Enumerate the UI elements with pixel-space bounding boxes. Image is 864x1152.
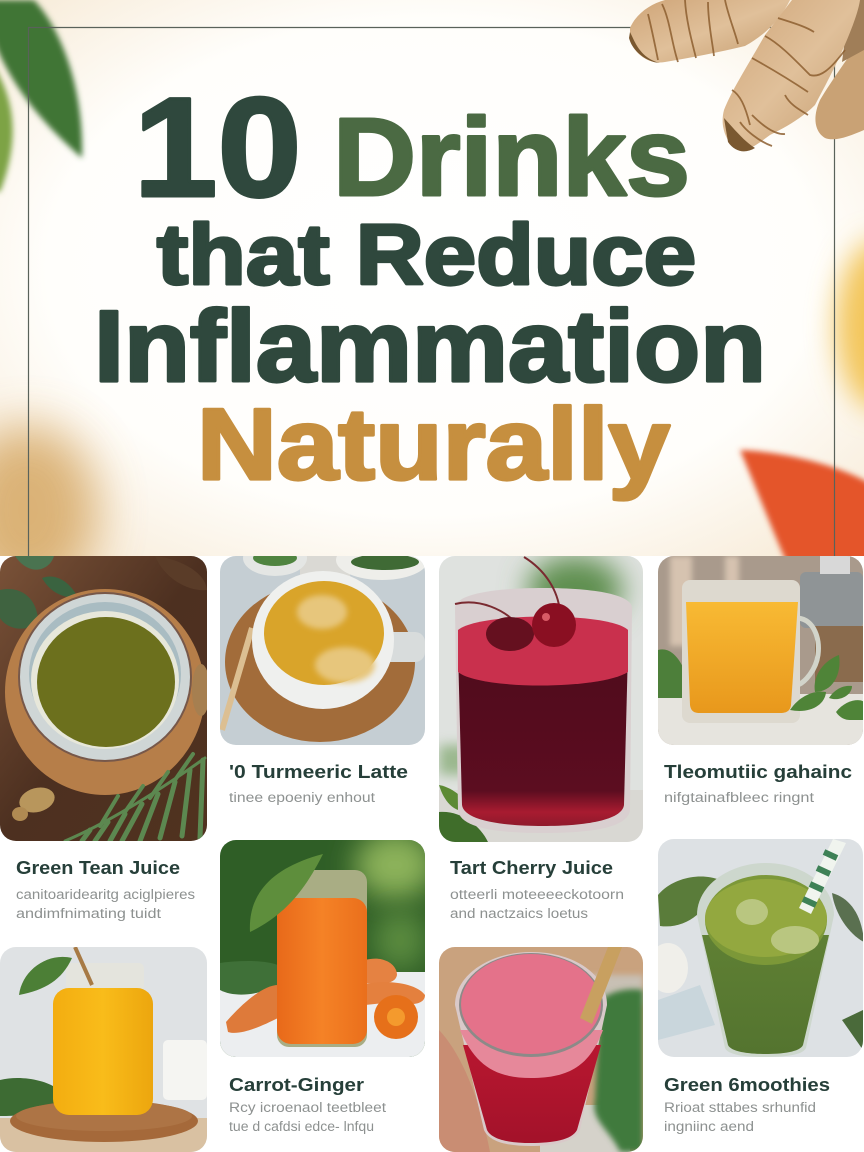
title: Inflammation: Inflammation	[94, 290, 766, 403]
caption: carrot-ginger: Carrot-Ginger	[229, 1075, 364, 1095]
caption: carrot-ginger: tue d cafdsi edce- lnfqu	[229, 1119, 374, 1134]
title: that Reduce: that Reduce	[157, 208, 696, 303]
blurred ginger bottom left	[0, 425, 98, 595]
title	[94, 69, 766, 501]
icon: ginger root	[629, 0, 864, 151]
caption: green smoothies	[664, 1075, 830, 1134]
caption: carrot-ginger: Rcy icroenaol teetbleet	[229, 1100, 386, 1115]
caption: tart cherry juice: otteerli moteeeeckotoorn	[450, 887, 624, 902]
caption: golden drink: Tleomutiic gahainc	[664, 762, 852, 782]
caption: green tea juice: canitoaridearitg aciglpieres	[16, 887, 195, 902]
caption: carrot-ginger	[229, 1075, 386, 1134]
caption: tart cherry juice: and nactzaics loetus	[450, 906, 588, 921]
caption: golden drink: nifgtainafbleec ringnt	[664, 790, 814, 805]
fern	[65, 754, 205, 841]
caption: green smoothies: ingniinc aend	[664, 1119, 754, 1134]
caption: green smoothies: Rrioat sttabes srhunfid	[664, 1100, 816, 1115]
thin frame	[28, 28, 834, 556]
caption: tart cherry juice: Tart Cherry Juice	[450, 858, 613, 878]
photo: green smoothie	[648, 839, 864, 1057]
caption: golden drink	[664, 762, 852, 805]
hero background	[0, 0, 864, 595]
title: Drinks: Drinks	[333, 95, 690, 219]
caption: tart cherry juice	[450, 858, 624, 921]
caption: green tea juice	[16, 858, 195, 921]
photo: tart cherry juice	[439, 556, 643, 842]
blurred orange leaf right	[740, 450, 864, 570]
caption: turmeric latte: '0 Turmeeric Latte	[229, 762, 408, 782]
photo: turmeric latte	[220, 540, 428, 745]
caption: green tea juice: Green Tean Juice	[16, 858, 180, 878]
photo: beet juice	[439, 947, 643, 1152]
photo: turmeric jar	[0, 947, 207, 1152]
photo: carrot ginger juice	[220, 831, 435, 1057]
blurred leaf top left	[0, 0, 82, 192]
photo: green tea	[0, 556, 210, 841]
title: Naturally: Naturally	[197, 388, 670, 501]
photo: golden juice mug	[658, 556, 864, 745]
caption: turmeric latte: tinee epoeniy enhout	[229, 790, 375, 805]
blurred yellow fruit right	[836, 240, 864, 410]
caption: turmeric latte	[229, 762, 408, 805]
title: 10: 10	[133, 69, 302, 227]
caption: green smoothies: Green 6moothies	[664, 1075, 830, 1095]
caption: green tea juice: andimfnimating tuidt	[16, 906, 161, 921]
